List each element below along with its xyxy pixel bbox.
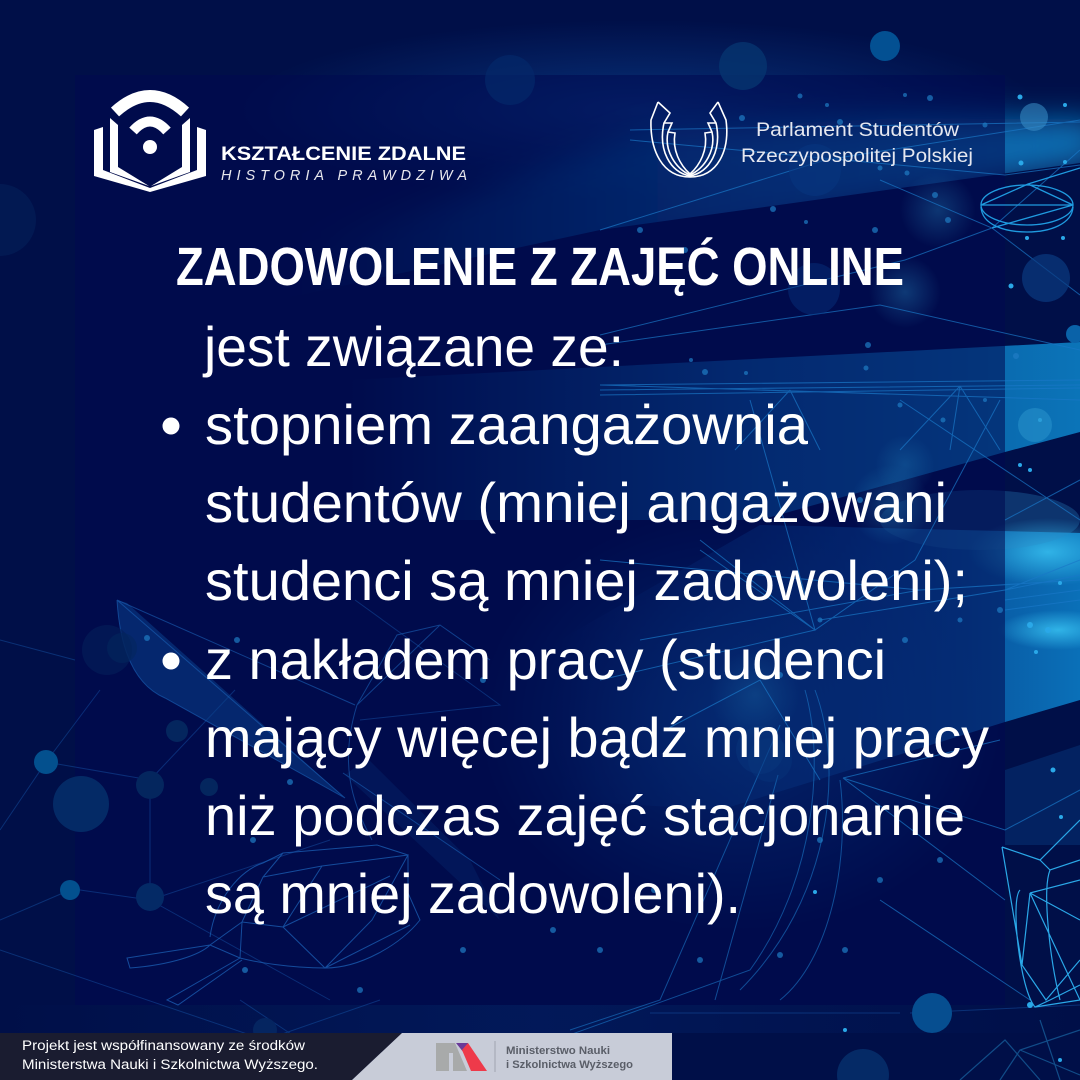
logo: Parlament Studentów: Rzeczypospolitej Polskiej [741, 145, 973, 167]
footer funding note: Projekt jest współfinansowany ze środków [22, 1038, 305, 1053]
dark central panel [75, 75, 1005, 1005]
bullet two: niż podczas zajęć stacjonarnie [205, 784, 965, 847]
bullet two [162, 628, 989, 925]
bullet two: mający więcej bądź mniej pracy [205, 706, 989, 769]
logo subtitle: HISTORIA PRAWDZIWA [221, 168, 467, 184]
bullet two: są mniej zadowoleni). [205, 862, 741, 925]
footer funding note [0, 1033, 402, 1080]
lower right crystal shape [960, 820, 1080, 1080]
parliament name: Parlament Studentów [756, 119, 960, 141]
logo: Kształcenie Zdalne [94, 96, 467, 192]
bullet one: studentów (mniej angażowani [205, 471, 947, 534]
footer [0, 1033, 672, 1080]
logo: Parlament Studentów [651, 102, 973, 177]
bullet two: z nakładem pracy (studenci [205, 628, 886, 691]
left leaf shape [117, 600, 500, 920]
scattered dots [144, 93, 1019, 993]
body text [162, 315, 989, 925]
footer funding note: Ministerstwa Nauki i Szkolnictwa Wyższego. [22, 1057, 318, 1072]
bullet one: studenci są mniej zadowoleni); [205, 549, 968, 612]
footer ministry logo: Ministerstwo Nauki [506, 1045, 610, 1057]
title: ZADOWOLENIE Z ZAJĘĆ ONLINE [176, 237, 904, 297]
background scene [256, 35, 1080, 1033]
leaf shape: top right seed [981, 168, 1080, 232]
bright outer dots [813, 94, 1067, 1062]
network lines left [0, 600, 1080, 1040]
footer ministry logo: i Szkolnictwa Wyższego [506, 1059, 633, 1071]
intro line: jest związane ze: [202, 315, 624, 378]
lower left crystal leaf [127, 845, 420, 1005]
bullet one: stopniem zaangażownia [205, 393, 809, 456]
network lines right [600, 120, 1080, 1000]
footer ministry logo [352, 1033, 672, 1080]
icon: open book with wifi signal [94, 96, 206, 192]
glow spots [710, 172, 976, 740]
right arc [500, 690, 842, 1060]
logo title: KSZTAŁCENIE ZDALNE [221, 144, 466, 165]
icon: parliament tulip emblem [651, 102, 727, 177]
bullet one [162, 393, 968, 612]
